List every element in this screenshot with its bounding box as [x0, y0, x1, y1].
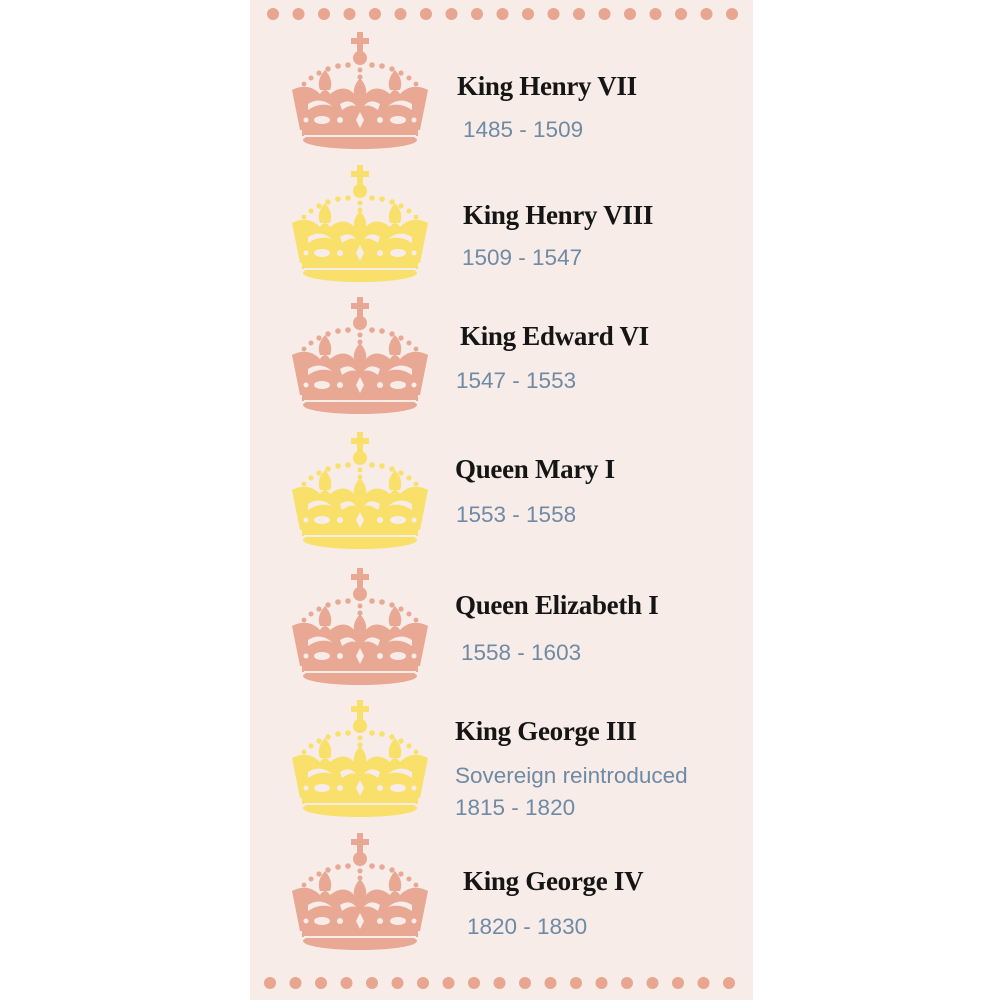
dots: bottom border [264, 977, 735, 989]
icon: crown pink 7 [292, 833, 428, 950]
dates: 1509 - 1547: 1509 - 1547 [462, 245, 582, 270]
icon: crown pink 3 [292, 297, 428, 414]
icon: crown pink 5 [292, 568, 428, 685]
panel: background [250, 0, 753, 1000]
dates: 1485 - 1509: 1485 - 1509 [463, 117, 583, 142]
title: King Edward VI: King Edward VI [460, 321, 649, 351]
dates: 1547 - 1553: 1547 - 1553 [456, 368, 576, 393]
title: Queen Mary I: Queen Mary I [455, 454, 615, 484]
icon: crown yellow 4 [292, 432, 428, 549]
title: King Henry VIII: King Henry VIII [463, 200, 653, 230]
dots: top border [267, 8, 738, 20]
dates: 1558 - 1603: 1558 - 1603 [461, 640, 581, 665]
title: King George IV: King George IV [463, 866, 643, 896]
dates: Sovereign reintroduced 1815 - 1820 [455, 763, 688, 820]
dates: Sovereign reintroduced 1815 - 1820: 1815 - 1820 [455, 795, 575, 820]
icon: crown yellow 6 [292, 700, 428, 817]
title: King George III: King George III [455, 716, 636, 746]
dates: Sovereign reintroduced 1815 - 1820: Sovereign reintroduced [455, 763, 688, 788]
icon: crown pink 1 [292, 32, 428, 149]
title: King Henry VII: King Henry VII [457, 71, 637, 101]
dates: 1553 - 1558: 1553 - 1558 [456, 502, 576, 527]
dates: 1820 - 1830: 1820 - 1830 [467, 914, 587, 939]
icon: crown yellow 2 [292, 165, 428, 282]
title: Queen Elizabeth I: Queen Elizabeth I [455, 590, 658, 620]
